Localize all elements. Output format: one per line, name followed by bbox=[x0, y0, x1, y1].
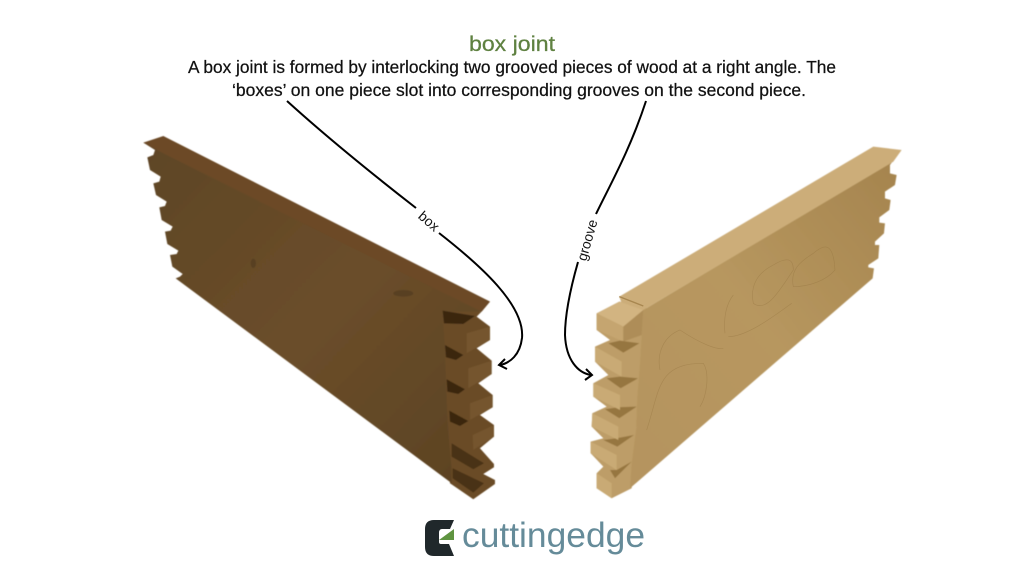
arrow: groove bbox=[565, 101, 646, 380]
logo mark bbox=[425, 520, 454, 556]
panel: light maple board with grooves bbox=[591, 147, 902, 498]
box end faces bbox=[467, 327, 494, 450]
board face bbox=[143, 140, 490, 499]
box notches bbox=[443, 311, 484, 493]
arrow: box bbox=[287, 101, 522, 369]
groove 1 bbox=[597, 302, 643, 327]
label: groove: groove bbox=[574, 217, 601, 262]
wood grain bbox=[647, 247, 835, 430]
logo wordmark: cuttingedge bbox=[462, 516, 645, 555]
label: box: box bbox=[415, 208, 443, 234]
top rail bbox=[619, 147, 902, 310]
logo bbox=[425, 516, 645, 556]
tooth block bbox=[440, 310, 495, 499]
title: box joint bbox=[469, 33, 555, 56]
tooth end faces bbox=[591, 347, 622, 498]
board face bbox=[630, 161, 897, 488]
blotches bbox=[393, 290, 413, 297]
panel: dark walnut board with boxes bbox=[143, 136, 495, 499]
rail notch bbox=[619, 297, 643, 306]
groove recesses bbox=[603, 341, 639, 478]
description text bbox=[188, 57, 836, 100]
tooth block bbox=[591, 302, 647, 498]
top rail bbox=[143, 136, 490, 312]
description text: ‘boxes’ on one piece slot into corresponding grooves on the second piece. bbox=[232, 80, 806, 100]
description text: A box joint is formed by interlocking two grooved pieces of wood at a right angle. The bbox=[188, 57, 836, 77]
